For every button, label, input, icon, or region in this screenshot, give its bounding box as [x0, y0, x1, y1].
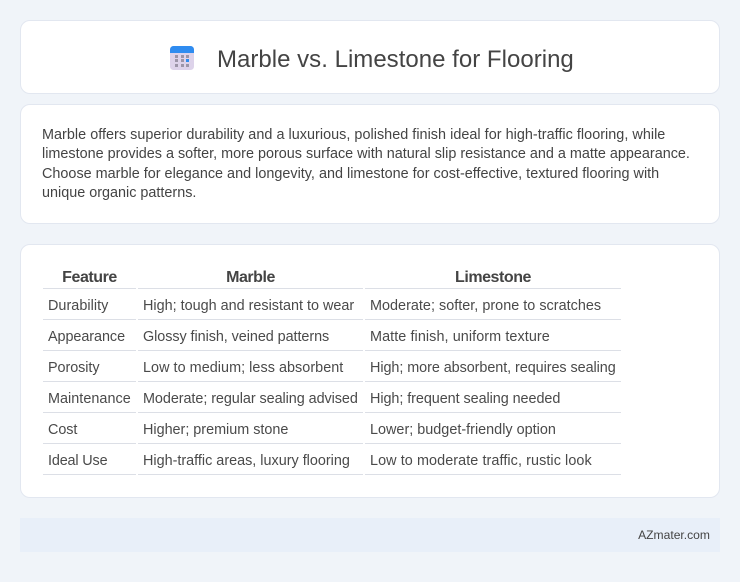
table header: Marble: [226, 269, 275, 286]
text: summary paragraph: limestone provides a softer, more porous surface with natural slip resistance and a matte appearance.: [42, 146, 690, 162]
row: maintenance: High; frequent sealing needed: [370, 391, 560, 407]
row: cost: [43, 422, 621, 444]
row: porosity: High; more absorbent, requires sealing: [370, 360, 616, 376]
row: appearance: Matte finish, uniform texture: [370, 329, 550, 345]
row: durability: High; tough and resistant to wear: [143, 298, 354, 314]
row: ideal use: Low to moderate traffic, rustic look: [370, 453, 592, 469]
row: cost: Lower; budget-friendly option: [370, 422, 556, 438]
row: cost: Cost: [48, 422, 77, 438]
row: maintenance: [43, 391, 621, 413]
table header: Feature: [62, 269, 117, 286]
text: summary paragraph: Choose marble for elegance and longevity, and limestone for cost-effective, textured flooring with: [42, 166, 659, 182]
row: cost: Higher; premium stone: [143, 422, 288, 438]
row: appearance: [43, 329, 621, 351]
row: porosity: Low to medium; less absorbent: [143, 360, 343, 376]
row: appearance: Appearance: [48, 329, 125, 345]
row: ideal use: [43, 453, 621, 475]
title: Marble vs. Limestone for Flooring: [217, 46, 574, 73]
row: appearance: Glossy finish, veined patterns: [143, 329, 329, 345]
text: summary paragraph: Marble offers superior durability and a luxurious, polished finish ideal for high-traffic flooring, while: [42, 127, 665, 143]
panel: summary: [20, 104, 720, 224]
text: summary paragraph: [42, 127, 690, 201]
row: porosity: [43, 360, 621, 382]
row: maintenance: Maintenance: [48, 391, 131, 407]
row: porosity: Porosity: [48, 360, 100, 376]
panel: comparison table: [20, 244, 720, 498]
table header: [43, 269, 621, 289]
footer credit: AZmater.com: [638, 528, 710, 542]
row: durability: Durability: [48, 298, 108, 314]
row: durability: Moderate; softer, prone to scratches: [370, 298, 601, 314]
panel: title card: [20, 20, 720, 94]
row: ideal use: High-traffic areas, luxury flooring: [143, 453, 350, 469]
row: ideal use: Ideal Use: [48, 453, 107, 469]
icon: calendar: [170, 46, 194, 70]
row: durability: [43, 298, 621, 320]
table header: Limestone: [455, 269, 531, 286]
footer bar: [20, 518, 720, 552]
row: maintenance: Moderate; regular sealing advised: [143, 391, 358, 407]
text: summary paragraph: unique organic patterns.: [42, 185, 196, 201]
